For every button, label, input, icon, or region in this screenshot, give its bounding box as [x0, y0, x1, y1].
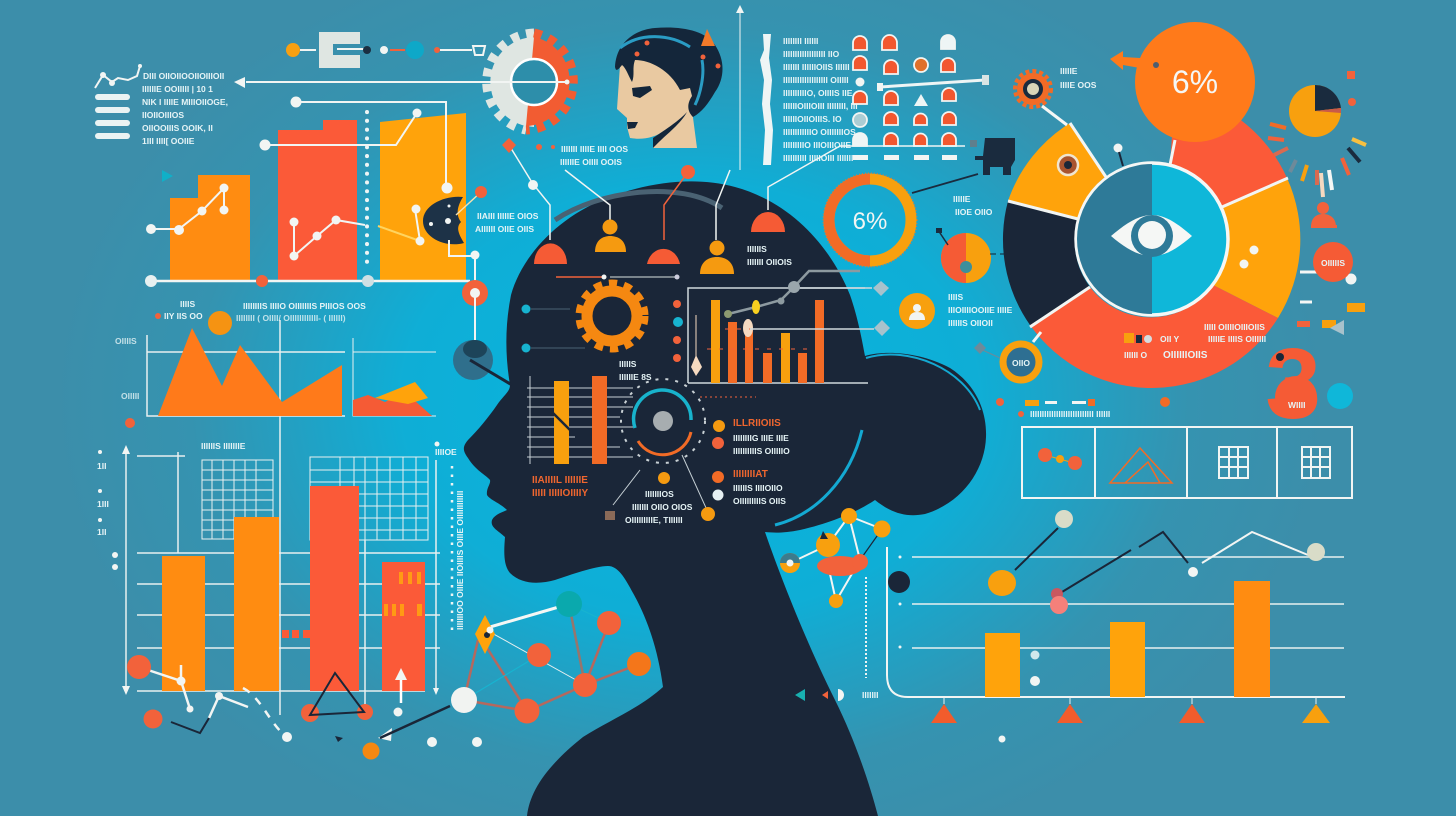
- eye icon: [1111, 215, 1192, 257]
- segment: right yellow: [1213, 178, 1300, 318]
- donut 6%: [823, 173, 917, 267]
- icon grid details: [840, 75, 989, 160]
- silhouette: head and bun: [464, 181, 986, 816]
- portrait: [615, 28, 722, 148]
- caption above bars: [700, 396, 756, 398]
- line series: [151, 188, 224, 229]
- orange 6% circle: [1110, 22, 1255, 142]
- radial dial: OIIIIIIIIIE, TIIIIII: [625, 515, 683, 525]
- neck and face: [617, 50, 697, 148]
- top connector nodes: [502, 5, 744, 190]
- top-left bar chart: [145, 96, 487, 287]
- numeral 3 badge: 3: [1265, 328, 1321, 440]
- table heading row: [996, 397, 1170, 419]
- side tick labels: 1III: [97, 499, 109, 509]
- hair: [615, 28, 722, 117]
- numeral 3 badge: WIIII: [1288, 400, 1305, 410]
- large eye pie chart: IIIII OIIIIOIIIOIIS: [1204, 322, 1265, 332]
- dome icon 3: [751, 212, 785, 232]
- hair dots: [634, 40, 720, 68]
- small label above gear connector: AIIIIII OIIE OIIS: [475, 224, 534, 234]
- text column top centre: IIIIIIOIIIOIII IIIIIIII, III: [783, 101, 858, 111]
- grid tables: [202, 457, 428, 540]
- text column top centre: IIIIIIIIIIO, OIIIIS IIE: [783, 88, 853, 98]
- inner head legend: IIIIIIIIG IIIE IIIE: [733, 433, 789, 443]
- orange caption: IIIII IIIIIOIIIIY: [532, 488, 588, 499]
- top caption: IIIIIS: [619, 359, 637, 369]
- central disc: [1076, 163, 1228, 315]
- dotted side column: [451, 466, 453, 630]
- large eye pie chart: OIIIIIIOIIS: [1163, 350, 1208, 361]
- ring badge: OIIO: [1012, 358, 1030, 368]
- pin above: [1114, 144, 1122, 152]
- inner head legend: OIIIIIIIIIS OIIS: [733, 496, 786, 506]
- text column top centre: IIIIIIIIIIIIIIIIIII OIIIII: [783, 75, 849, 85]
- inner head legend: ILLRIIOIIS: [733, 418, 781, 429]
- dark pacman: [423, 197, 464, 244]
- person icon: [1311, 202, 1337, 228]
- right segment dots: [1250, 246, 1258, 254]
- small label above gear connector: IIAIII IIIIIE OIOS: [477, 211, 539, 221]
- bars: [711, 300, 720, 383]
- bottom-right chart: [795, 510, 1345, 742]
- small label above gear connector: [475, 211, 539, 234]
- connector lines to head icons: [509, 10, 840, 240]
- dome icon 1: [534, 243, 567, 264]
- bars: [985, 633, 1020, 697]
- radial dial: IIIIIIIOS: [645, 489, 674, 499]
- cyan hair band: [620, 37, 703, 105]
- large eye pie chart: OII Y: [1160, 334, 1180, 344]
- orange gear in head: [522, 274, 683, 362]
- neural network on neck: [451, 591, 651, 724]
- text column top centre: IIIIIIII IIIIII: [783, 36, 818, 46]
- bottom-left bar chart: [97, 416, 465, 715]
- area chart panel: IIIIIIIIS IIIIO OIIIIIIIS PIIIOS OOS: [243, 301, 366, 311]
- arrow pointing left from gear: [234, 77, 570, 88]
- bottom-right chart: IIIIIII: [862, 690, 879, 700]
- small area: [353, 392, 432, 416]
- top connector nodes: IIIIIII IIIIE IIII OOS: [561, 144, 628, 154]
- segment: top red: [1170, 92, 1287, 207]
- list text: NIK I IIIIE MIIIOIIOGE,: [142, 97, 228, 107]
- small pie with caption: IIIIIE: [953, 194, 971, 204]
- top connector nodes: IIIIIIE OIIII OOIS: [560, 157, 622, 167]
- donut 6%: 6%: [853, 208, 887, 235]
- list text: DIII OIIOIIOOIIOIIIOII: [143, 71, 224, 81]
- dark chair icon: [912, 138, 1015, 193]
- radial dial: [605, 379, 715, 525]
- person icon 1: [595, 220, 626, 252]
- area chart captions: IIIIS: [180, 299, 195, 309]
- small network right of neck: [780, 508, 910, 608]
- yellow bar: [380, 113, 466, 280]
- segment: yellow wedge: [1008, 123, 1105, 219]
- ring badge: [974, 332, 1041, 380]
- cell 4 grid: [1302, 447, 1330, 478]
- cell 1 dots: [1045, 455, 1074, 463]
- inner head legend: IIIIIIIIIIS OIIIIIO: [733, 446, 790, 456]
- head icons row: [534, 212, 792, 274]
- side tick labels: [97, 450, 109, 537]
- radial dial: IIIIIII OIIO OIOS: [632, 502, 693, 512]
- connector node to area chart: [453, 280, 512, 385]
- right table panel: [996, 397, 1352, 498]
- table grid: [1022, 427, 1352, 498]
- axis: [150, 280, 470, 282]
- segment: left dark: [1003, 201, 1090, 325]
- list text: OIIOOIIIS OOIK, II: [142, 123, 213, 133]
- list bars: [95, 94, 130, 139]
- person badge with caption: IIIIIIS OIIOII: [948, 318, 993, 328]
- area chart panel: [115, 299, 436, 416]
- text column top centre: IIIIIII IIIIIIOIIS IIIIII: [783, 62, 850, 72]
- head caption: IIIIIII OIIOIS: [747, 257, 792, 267]
- right side badges: OIIIIIS: [1321, 258, 1345, 268]
- bars: [162, 556, 205, 691]
- top-left sparkline with text list: [95, 64, 228, 146]
- orange caption: IIAIIIIL IIIIIIE: [532, 475, 588, 486]
- large eye pie chart: IIIIIE IIIIS OIIIIII: [1208, 334, 1266, 344]
- table heading row: IIIIIIIIIIIIIIIIIIIIIIIIIII IIIIII: [1030, 409, 1110, 419]
- eye and lips: [627, 86, 652, 129]
- small pie with caption: IIOE OIIO: [955, 207, 993, 217]
- line series: [1015, 528, 1188, 592]
- inner head legend: IIIIIIIIAT: [733, 469, 768, 480]
- list text: IIIIIIE OOIIIII | 10 1: [142, 84, 213, 94]
- right gear dots: [673, 300, 681, 308]
- trend line: [728, 271, 860, 314]
- side nodes: [750, 288, 874, 329]
- chart title: IIIIIIS IIIIIIIE: [201, 441, 246, 451]
- person badge with caption: [899, 292, 1013, 329]
- text column top centre: IIIIIIIIIIIIO OIIIIIIIOS: [783, 127, 856, 137]
- text column top centre: IIIIIIIIIIIIIIIIII IIO: [783, 49, 840, 59]
- segment dividers: [1008, 123, 1288, 327]
- gear badge with caption: IIIIIE: [1060, 66, 1078, 76]
- small pie with caption: [936, 194, 1075, 283]
- text column top centre: IIIIIIOIIOIIIS. IO: [783, 114, 842, 124]
- area chart panel: IIY IIS OO: [164, 311, 203, 321]
- orange bar: [170, 175, 250, 280]
- cell 2 triangles: [1110, 448, 1172, 483]
- person badge with caption: IIIIS: [948, 292, 963, 302]
- axes and rules: [126, 416, 440, 715]
- area chart panel: OIIIII: [121, 391, 139, 401]
- small bottom marks: [795, 689, 805, 701]
- large eye pie chart: IIIIII O: [1124, 350, 1148, 360]
- cell 3 grid: [1219, 447, 1248, 478]
- yellow wedge target: [1058, 155, 1078, 175]
- red label circle: [1313, 242, 1353, 282]
- head caption: IIIIIIS: [747, 244, 767, 254]
- person badge with caption: IIIOIIIIOOIIE IIIIE: [948, 305, 1013, 315]
- area chart panel: IIIIIIII ( OIIII/ OIIIIIIIIIIII- ( IIIIII): [236, 313, 346, 323]
- list text: IIOIIOIIIOS: [142, 110, 184, 120]
- text column top centre: [760, 34, 858, 165]
- dome icon 2: [647, 249, 680, 264]
- dome icon grid: [853, 35, 956, 146]
- red bar: [278, 120, 357, 280]
- bottom segment labels: [1124, 333, 1134, 343]
- inner head legend: [712, 418, 790, 506]
- small pie with rays: [1268, 71, 1366, 197]
- person icon 2: [700, 240, 734, 274]
- bottom-left bar chart: IIIIOE: [435, 447, 457, 457]
- side tick labels: 1II: [97, 527, 106, 537]
- gear badge with caption: IIIIE OOS: [1060, 80, 1097, 90]
- connector lines: [296, 102, 446, 188]
- text column top centre: IIIIIIIIIO IIIOIIIOIIE: [783, 140, 851, 150]
- top connector row: [286, 32, 485, 68]
- inner head legend: IIIIIIS IIIIOIIO: [733, 483, 783, 493]
- right side badges: [1297, 202, 1365, 335]
- numeral 3 badge: [1265, 328, 1353, 440]
- bottom network and triangle: [127, 655, 482, 760]
- inner head bar chart: [688, 271, 890, 383]
- gear with half red: [470, 33, 573, 130]
- triangle markers: [944, 697, 1316, 704]
- list text: 1III IIII[ OOIIE: [142, 136, 195, 146]
- orange triangle: [701, 29, 715, 46]
- left gear connectors: [522, 304, 530, 314]
- inner head left bars: [527, 359, 652, 499]
- vertical side text: IIIIIIIOO OIIIE IIOIIIIS OIIIE OIIIIIIIIIIII: [455, 491, 465, 630]
- main area: [158, 328, 342, 416]
- segment: bottom red: [1030, 285, 1278, 388]
- top caption: IIIIIIE 8S: [619, 372, 652, 382]
- text column top centre: IIIIIIIIII IIIIIOIII IIIIIII: [783, 153, 853, 163]
- large eye pie chart: [1003, 92, 1300, 388]
- area chart panel: OIIIIS: [115, 336, 137, 346]
- orange 6% circle: 6%: [1172, 64, 1218, 100]
- side tick labels: 1II: [97, 461, 106, 471]
- gear badge with caption: [1015, 66, 1097, 125]
- dotted column: [365, 112, 369, 270]
